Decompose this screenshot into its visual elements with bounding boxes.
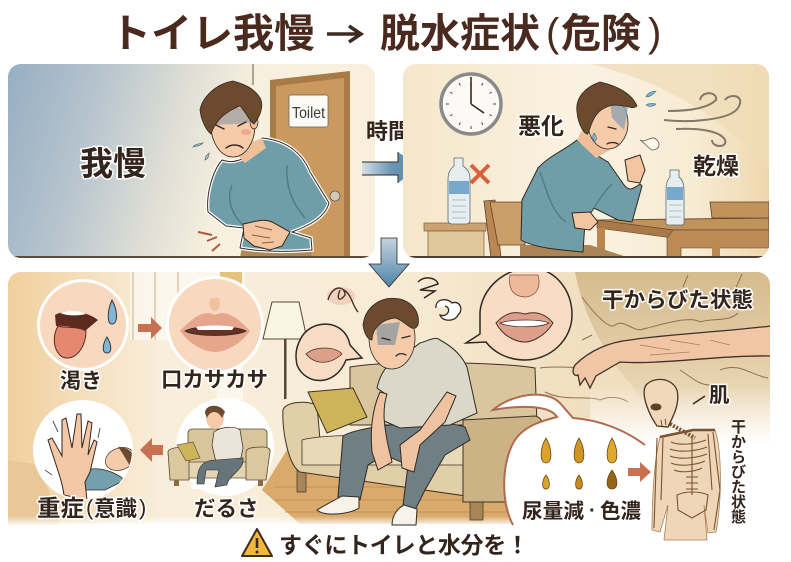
chair bbox=[484, 200, 525, 258]
panel: holding it in bbox=[8, 64, 375, 258]
vertical label: dried-up state: 状 bbox=[731, 493, 746, 511]
dry background texture bbox=[540, 272, 770, 402]
floor lamp bbox=[263, 302, 307, 399]
title: ( bbox=[546, 11, 560, 55]
vertical label: dried-up state: か bbox=[731, 434, 746, 451]
title: ) bbox=[648, 11, 661, 55]
feet bbox=[317, 496, 359, 514]
icon: raised hand bbox=[48, 414, 97, 500]
vertical label: dried-up state: 干 bbox=[731, 419, 746, 436]
arms bbox=[371, 392, 392, 470]
label: dry mouth: 口カサカサ bbox=[161, 368, 268, 392]
head bbox=[369, 307, 415, 369]
icon: empty water bottle bbox=[448, 158, 470, 224]
vertical label: dried-up state: ら bbox=[731, 449, 746, 466]
person coughing bbox=[520, 82, 659, 258]
icon: cross mark bbox=[471, 165, 489, 183]
floor bbox=[8, 460, 60, 525]
skull bbox=[644, 379, 678, 427]
label: severe: ) bbox=[139, 495, 146, 520]
label: fatigue: だるさ bbox=[194, 497, 259, 521]
panel: getting worse bbox=[403, 64, 769, 258]
body silhouette bbox=[652, 430, 720, 540]
arrow: fatigue to severe bbox=[140, 438, 163, 462]
shirt bbox=[377, 338, 477, 428]
title: トイレ我慢 bbox=[110, 12, 315, 56]
icon: pain marks bbox=[198, 232, 220, 251]
label: severe: 重症 bbox=[37, 495, 84, 521]
label: severe bbox=[37, 495, 146, 521]
label: dried-up state: 干からびた状態 bbox=[602, 289, 753, 312]
bottom fade bbox=[8, 516, 512, 525]
speech bubble: large dry lips bbox=[466, 268, 572, 360]
icon: warning triangle bbox=[242, 529, 272, 556]
icon: dizzy scribbles bbox=[327, 278, 461, 320]
panel: dehydration symptoms bbox=[8, 268, 778, 562]
label: less, darker urine: 色濃 bbox=[600, 500, 641, 523]
symptom: fatigue bbox=[168, 398, 274, 496]
urine speech bubble bbox=[493, 395, 645, 525]
cushion bbox=[308, 388, 367, 433]
arrow: down to symptoms bbox=[369, 238, 409, 287]
icon: tongue bbox=[54, 311, 98, 358]
heading: 我慢: 我慢 bbox=[80, 145, 146, 182]
small sofa bbox=[168, 429, 270, 486]
arrow: title arrow bbox=[327, 26, 361, 42]
vertical label: dried-up state bbox=[731, 419, 746, 526]
callout: warning: すぐにトイレと水分を！ bbox=[279, 532, 529, 558]
dry arm bbox=[573, 326, 771, 388]
pants bbox=[338, 423, 470, 510]
arrow: time label and arrow: 時間 bbox=[366, 119, 410, 144]
right fade to white bbox=[590, 392, 770, 445]
main sofa bbox=[283, 363, 542, 520]
person holding stomach bbox=[193, 81, 329, 258]
symptom: thirst bbox=[37, 279, 129, 371]
label: less, darker urine: 尿量減 bbox=[522, 499, 585, 523]
icon: urine drops bbox=[541, 438, 617, 489]
label: skin with pointer bbox=[693, 384, 730, 407]
arrow: thirst to dry mouth bbox=[138, 317, 162, 339]
small person bbox=[191, 406, 243, 490]
cabinet bbox=[424, 223, 486, 258]
person lying down bbox=[86, 446, 132, 490]
symptom: dry mouth bbox=[166, 276, 264, 374]
table bbox=[597, 202, 769, 258]
heading: 乾燥: 乾燥 bbox=[693, 153, 739, 179]
icon: water drops bbox=[103, 300, 116, 353]
arrow: time label and arrow bbox=[362, 119, 420, 183]
icon: dry wind bbox=[664, 93, 740, 146]
skeleton bbox=[644, 379, 720, 540]
symptom: severe bbox=[33, 400, 138, 500]
label: thirst: 渇き bbox=[60, 370, 102, 393]
curtain bbox=[130, 272, 245, 400]
title: 脱水症状 bbox=[380, 12, 540, 56]
vertical label: dried-up state: び bbox=[731, 464, 746, 481]
icon: wall clock bbox=[441, 74, 501, 134]
label: severe: 意識 bbox=[94, 497, 137, 521]
icon: water bottle bbox=[666, 170, 684, 225]
label: less, darker urine: · bbox=[589, 500, 596, 522]
speech bubble: small lips bbox=[296, 324, 362, 381]
vertical label: dried-up state: 態 bbox=[731, 508, 746, 526]
ribs, spine and pelvis bbox=[654, 432, 720, 530]
label: less, darker urine bbox=[522, 499, 641, 523]
title bbox=[110, 11, 661, 56]
arrow: to skeleton bbox=[628, 462, 651, 482]
heading: 悪化: 悪化 bbox=[518, 113, 564, 139]
main tired person bbox=[317, 298, 477, 525]
label: severe: ( bbox=[86, 495, 94, 520]
vertical label: dried-up state: た bbox=[731, 479, 746, 496]
label: skin with pointer: 肌 bbox=[709, 384, 730, 407]
title: 危険 bbox=[561, 12, 641, 56]
toilet door bbox=[270, 71, 350, 258]
toilet door: Toilet bbox=[292, 105, 325, 122]
